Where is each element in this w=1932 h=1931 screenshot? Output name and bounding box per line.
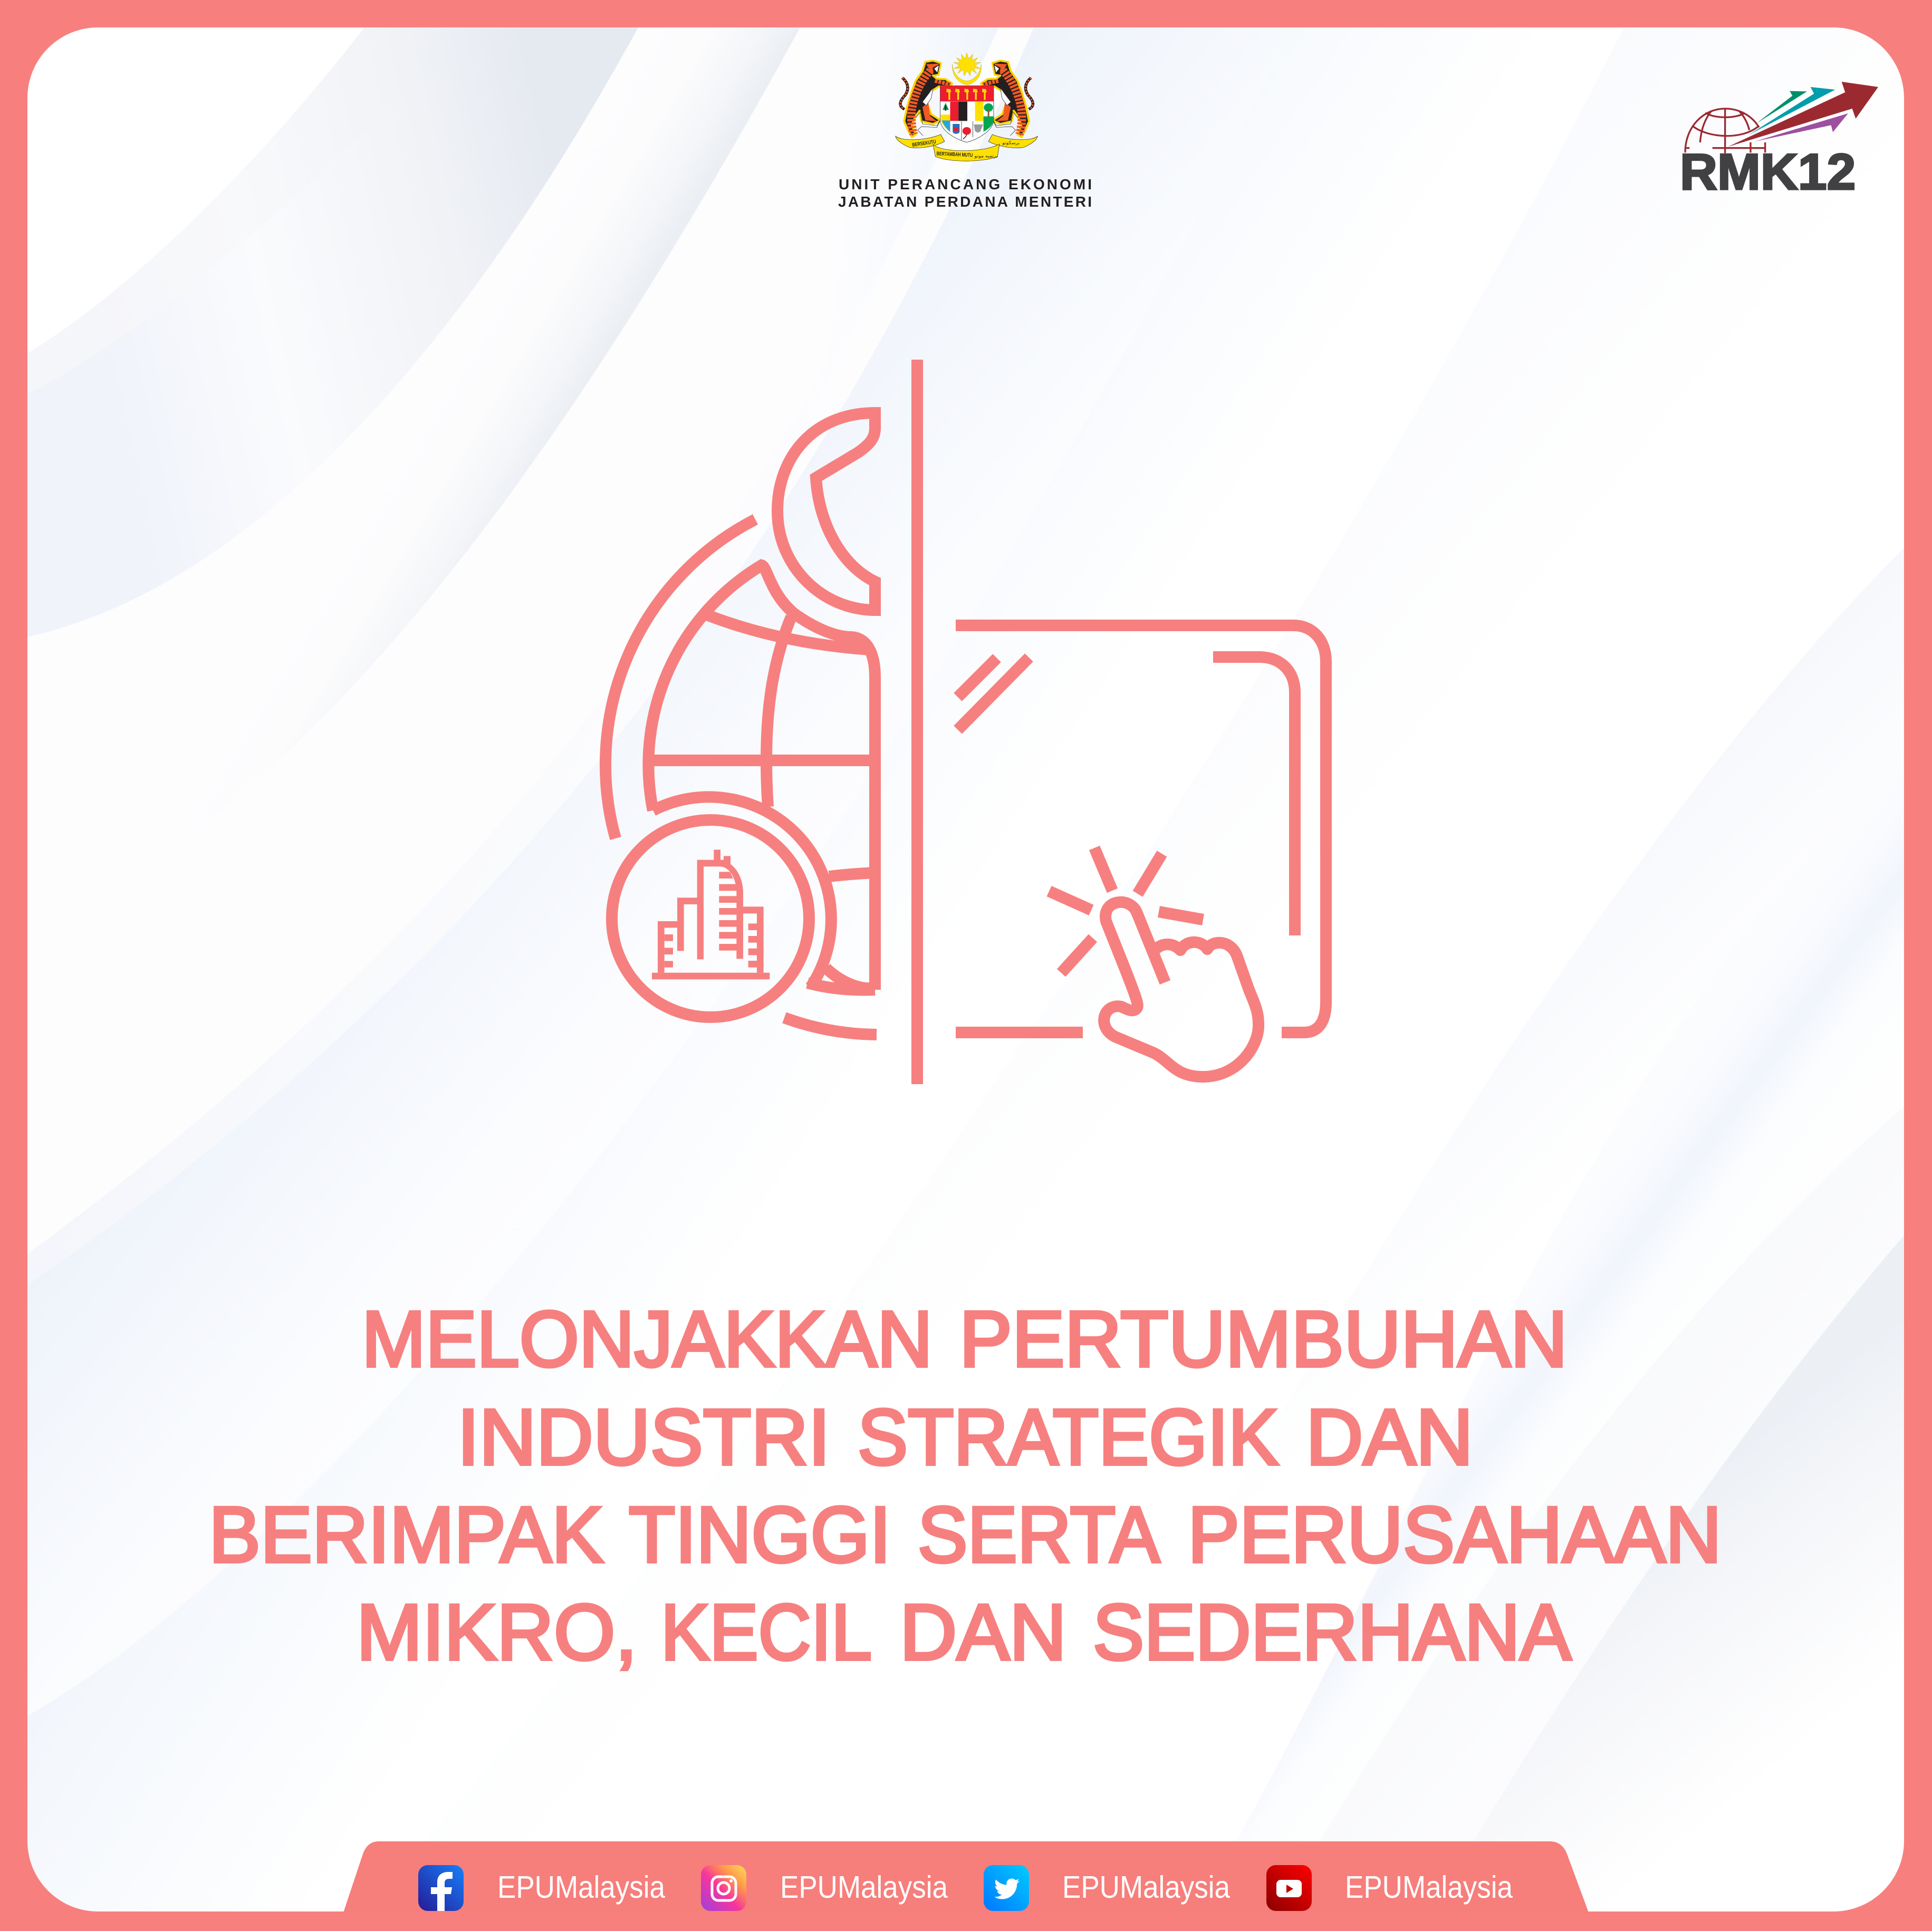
facebook handle: EPUMalaysia (497, 1870, 665, 1905)
title: DAN (1306, 1393, 1473, 1481)
icon: city buildings (652, 849, 770, 979)
title: KECIL (661, 1588, 872, 1676)
inner screen corner (1213, 657, 1295, 935)
logo: Malaysian coat of arms: BERSEKUTU (912, 139, 937, 148)
globe equator (648, 755, 875, 766)
icon: touch screen with hand (956, 625, 1326, 1077)
globe meridian (766, 617, 791, 807)
title: DAN (900, 1588, 1066, 1676)
tap rays (1049, 848, 1203, 973)
lower outer arc (784, 1018, 877, 1035)
title: SERTA (918, 1490, 1160, 1579)
icon: instagram (701, 1865, 746, 1911)
globe lower latitude (829, 873, 875, 876)
title: PERTUMBUHAN (959, 1295, 1568, 1383)
title: MELONJAKKAN (362, 1295, 933, 1383)
screen outline (956, 625, 1326, 1032)
central divider bar (911, 360, 923, 1084)
title: STRATEGIK (858, 1393, 1279, 1481)
glass reflection lines (958, 658, 1029, 730)
lens outer arc (653, 797, 831, 987)
outer arc (605, 519, 755, 838)
icon: globe with head and building (605, 413, 877, 1035)
title: TINGGI (629, 1490, 891, 1579)
title: PERUSAHAAN (1188, 1490, 1722, 1579)
heading: Unit Perancang Ekonomi: UNIT PERANCANG EKONOMI (839, 176, 1092, 192)
globe bottom curves (808, 968, 875, 990)
logo: Malaysian coat of arms (896, 53, 1037, 161)
logo: RMK12: RMK12 (1680, 143, 1856, 200)
twitter handle: EPUMalaysia (1062, 1870, 1230, 1905)
globe latitude top (707, 615, 869, 650)
title: MIKRO, (357, 1588, 637, 1676)
footer tab (343, 1841, 1589, 1913)
youtube handle: EPUMalaysia (1345, 1870, 1513, 1905)
title (209, 1295, 1722, 1676)
heading: Unit Perancang Ekonomi (838, 176, 1092, 210)
magnifier circle (612, 820, 809, 1017)
logo: Malaysian coat of arms: برسكوتو (1002, 140, 1020, 145)
icon: youtube (1266, 1865, 1312, 1911)
globe outline (648, 565, 875, 990)
logo: RMK12 (1680, 82, 1878, 200)
logo: Malaysian coat of arms: برتمبه موتو (974, 153, 998, 158)
head silhouette (777, 413, 875, 610)
title: INDUSTRI (457, 1393, 830, 1481)
instagram handle: EPUMalaysia (780, 1870, 948, 1905)
social links (418, 1865, 1513, 1911)
icon: twitter (984, 1865, 1029, 1911)
title: SEDERHANA (1093, 1588, 1571, 1676)
logo: Malaysian coat of arms: BERTAMBAH MUTU (936, 151, 973, 159)
icon: facebook (418, 1865, 464, 1911)
heading: Unit Perancang Ekonomi: JABATAN PERDANA MENTERI (838, 194, 1092, 210)
title: BERIMPAK (209, 1490, 603, 1579)
pointing hand (1104, 902, 1258, 1077)
